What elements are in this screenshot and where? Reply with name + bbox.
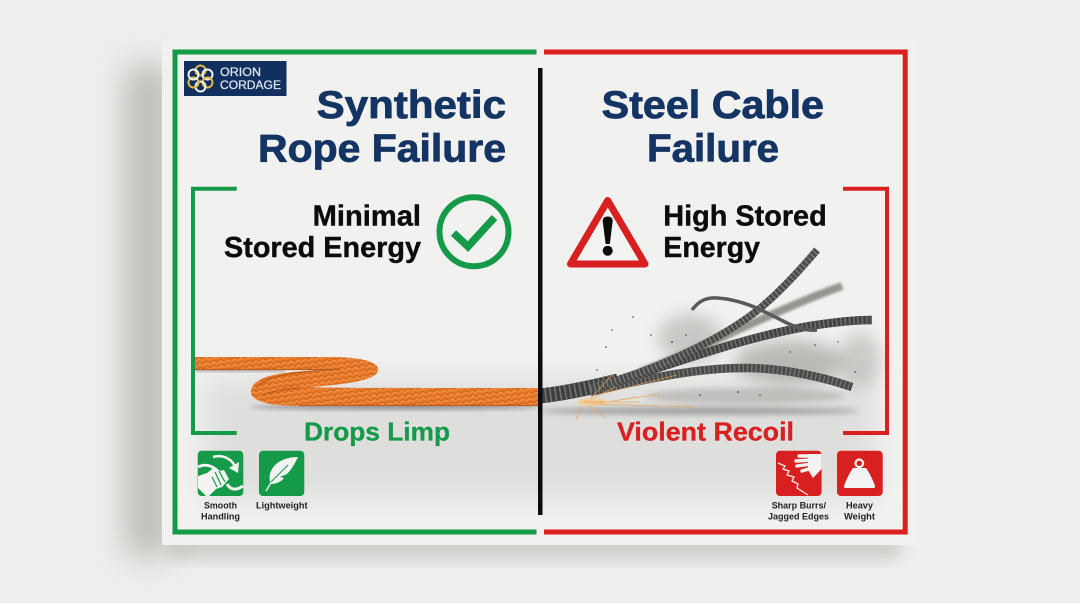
icon label: smooth handling [201,500,240,522]
icon: smooth handling [198,451,243,496]
icon label: smooth handling: Smooth [204,500,237,512]
floor texture [205,378,875,500]
label: violent recoil: Violent Recoil [617,417,794,447]
poster shadow [126,66,900,558]
icon label: heavy weight: Weight [844,512,876,522]
sparks [576,375,695,420]
steel cable [540,250,872,396]
icon: warning triangle [570,200,645,264]
heading: high stored energy: High Stored [663,201,827,233]
logo text: CORDAGE [220,80,281,92]
panel: synthetic rope frame [175,52,536,532]
heading: minimal stored energy [224,201,421,264]
icon label: lightweight: Lightweight [256,500,308,512]
orange synthetic rope [195,357,538,406]
icon: sharp burrs [776,451,822,496]
bracket: red [843,189,887,433]
logo text [220,67,281,92]
rope shadow [195,369,540,410]
heading: minimal stored energy: Stored Energy [224,232,421,264]
icon: heavy weight [837,451,883,496]
heading: minimal stored energy: Minimal [313,201,421,233]
title: Synthetic Rope Failure [258,84,506,171]
lower strand [590,368,852,392]
icon: check mark circle [440,197,508,266]
bracket: green [193,189,237,433]
debris particles [596,316,856,396]
logo: Orion Cordage [184,61,286,96]
broken wire [692,298,817,330]
title: Steel Cable Failure: Steel Cable [602,84,824,127]
icon label: heavy weight: Heavy [846,500,874,512]
center divider [538,68,542,515]
icon: knot [188,66,212,92]
upper strand [590,250,817,388]
faded recoiling strand [640,286,842,372]
poster panel [162,40,917,545]
cable base [540,381,618,396]
heading: high stored energy: Energy [663,232,760,264]
label: drops limp: Drops Limp [304,417,450,447]
icon label: sharp burrs: Sharp Burrs/ [772,500,826,512]
heading: high stored energy [663,201,827,264]
title: Synthetic Rope Failure: Synthetic [317,84,506,127]
title: Steel Cable Failure [602,84,824,171]
title: Synthetic Rope Failure: Rope Failure [258,128,506,171]
middle strand [600,320,872,387]
icon label: heavy weight [844,500,876,522]
icon label: smooth handling: Handling [201,512,240,522]
icon: lightweight feather [259,451,304,496]
title: Steel Cable Failure: Failure [647,128,779,171]
panel: steel cable frame [544,52,905,532]
icon label: sharp burrs [768,500,829,522]
logo text: ORION [220,67,261,79]
icon label: sharp burrs: Jagged Edges [768,512,829,522]
steel cable smoke [540,314,880,414]
